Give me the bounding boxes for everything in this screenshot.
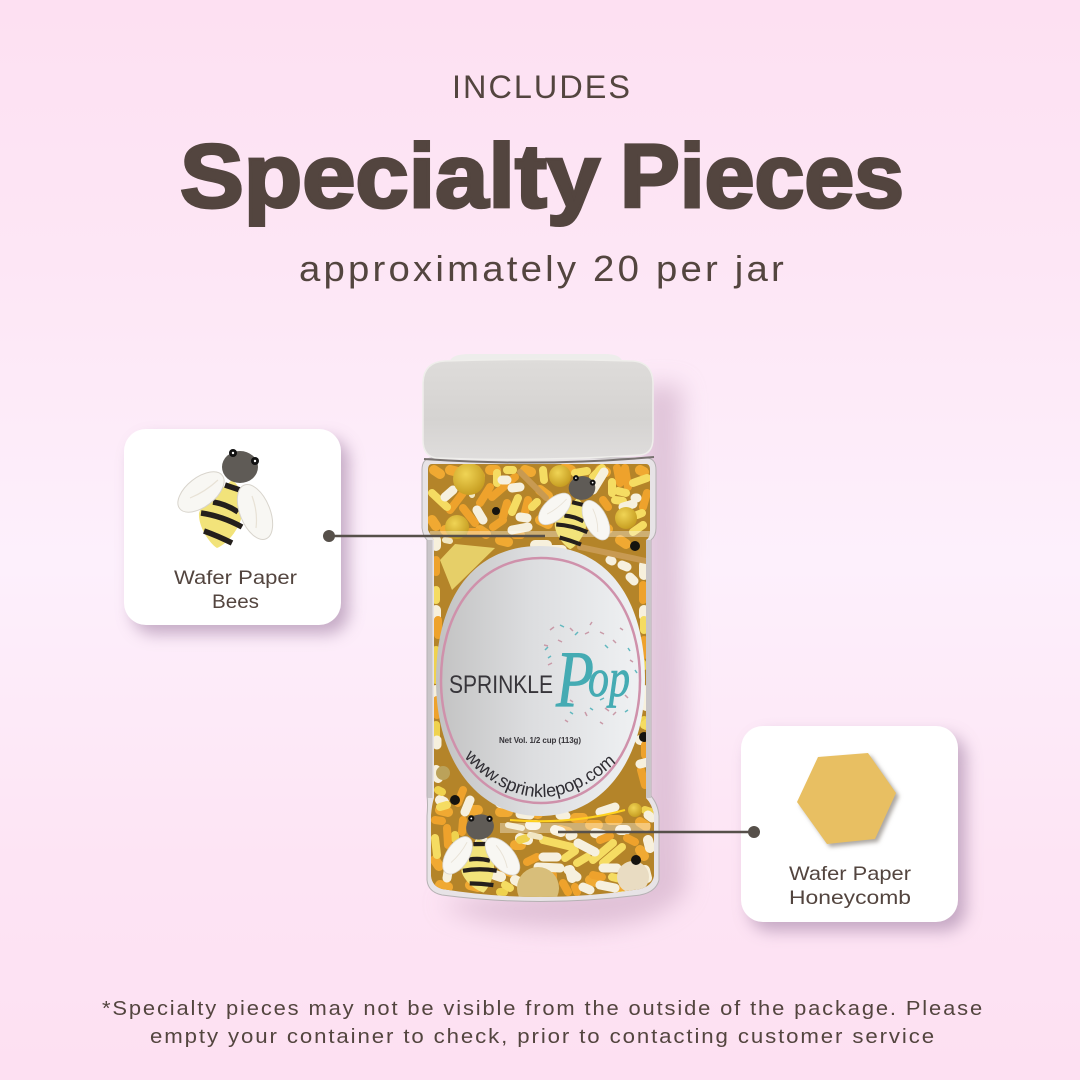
glass glare bands (500, 823, 650, 833)
card label: honeycomb (789, 863, 912, 909)
card label: bees: Wafer Paper (174, 567, 298, 589)
jar drop shadow (440, 385, 686, 928)
gold pearls (436, 463, 649, 909)
subtitle: approximately 20 per jar (299, 248, 787, 289)
net volume: Net Vol. 1/2 cup (113g) (499, 736, 581, 745)
eyebrow: includes: INCLUDES (452, 69, 632, 105)
logo: Pop: op (588, 648, 630, 708)
title: Pieces (620, 127, 904, 227)
jar body (422, 458, 659, 902)
footnote (102, 998, 984, 1048)
jar cap (423, 354, 654, 463)
jar label (436, 546, 645, 816)
card label: honeycomb: Honeycomb (789, 887, 911, 909)
logo: Pop: P (555, 636, 594, 724)
footnote: empty your container to check, prior to contacting customer service (150, 1026, 936, 1048)
base layer sprinkles (432, 468, 646, 890)
card shadow: honeycomb (749, 735, 966, 931)
website arc path (464, 755, 624, 797)
website: www.sprinklepop.com (466, 750, 616, 799)
sprinkle fill (425, 460, 657, 909)
card: wafer paper honeycomb (741, 726, 958, 922)
connector: bees (323, 530, 545, 542)
card shadow: bees (132, 438, 349, 634)
card label: bees (174, 567, 298, 613)
label sprinkle dots (544, 622, 633, 724)
title: Specialty (180, 127, 600, 227)
product jar (422, 354, 660, 902)
icon: honeycomb (797, 753, 896, 844)
connector: honeycomb (558, 826, 760, 838)
card label: bees: Bees (212, 591, 259, 613)
title (180, 127, 904, 227)
jar bee top (530, 472, 617, 552)
footnote: *Specialty pieces may not be visible from the outside of the package. Please (102, 998, 984, 1020)
card: wafer paper bees (124, 429, 341, 625)
logo: Pop (555, 636, 630, 724)
card label: honeycomb: Wafer Paper (789, 863, 912, 885)
icon: bee (171, 449, 280, 548)
logo: SPRINKLE: SPRINKLE (449, 671, 553, 699)
jar bee bottom (424, 804, 530, 904)
wafer honeycomb in jar (440, 544, 495, 590)
glass edges (430, 540, 648, 798)
